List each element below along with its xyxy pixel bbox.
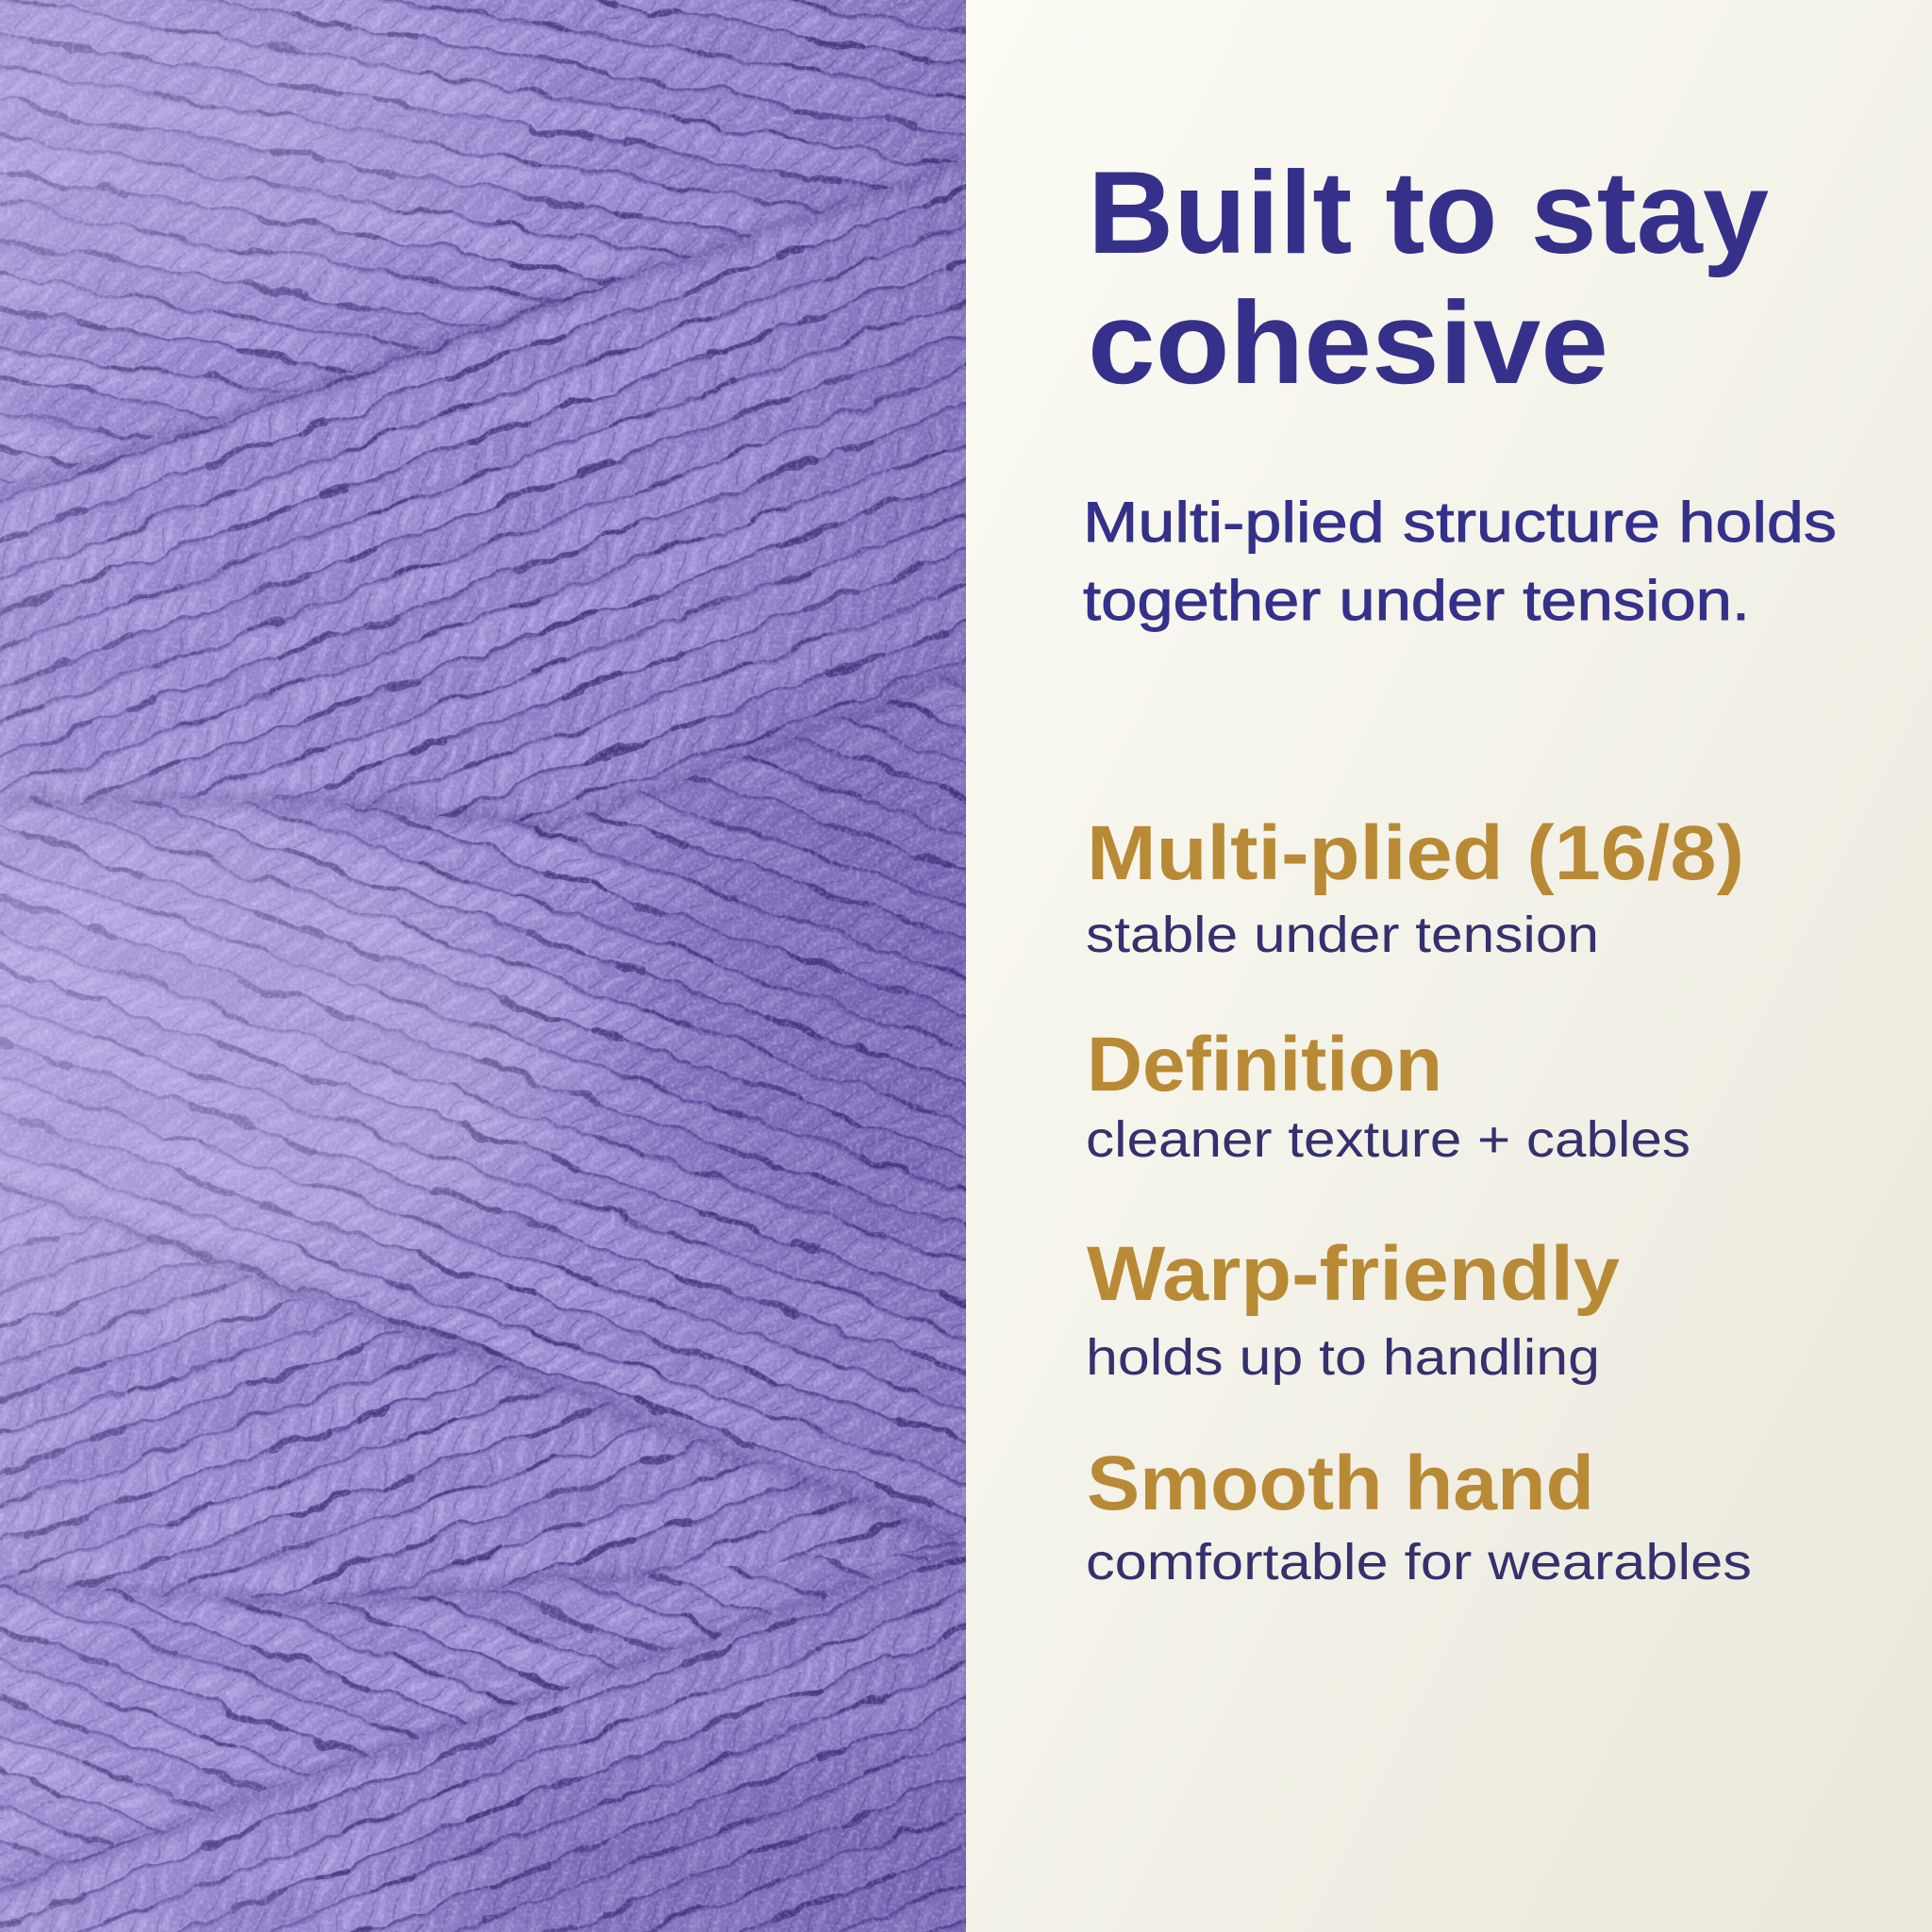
feature: definition: cleaner texture + cables [1086,1111,1690,1168]
feature: warp-friendly: holds up to handling [1086,1329,1600,1386]
title [1088,148,1769,408]
photo: purple yarn close-up [0,0,1057,1932]
feature: definition [1086,1022,1690,1168]
feature: smooth hand: comfortable for wearables [1086,1534,1752,1591]
feature: multi-plied: stable under tension [1086,907,1599,963]
intro text: Multi-plied structure holds [1083,491,1837,554]
feature: warp-friendly [1086,1231,1620,1386]
title: Built to stay [1088,148,1769,278]
intro text [1083,491,1837,632]
feature: definition: Definition [1087,1022,1442,1108]
feature: multi-plied [1086,810,1744,963]
feature: smooth hand: Smooth hand [1087,1441,1594,1526]
panel: text background [966,0,1932,1932]
feature: multi-plied: Multi-plied (16/8) [1087,810,1744,896]
feature: warp-friendly: Warp-friendly [1087,1231,1620,1317]
feature: smooth hand [1086,1441,1752,1591]
intro text: together under tension. [1083,569,1750,632]
title: cohesive [1088,278,1608,408]
